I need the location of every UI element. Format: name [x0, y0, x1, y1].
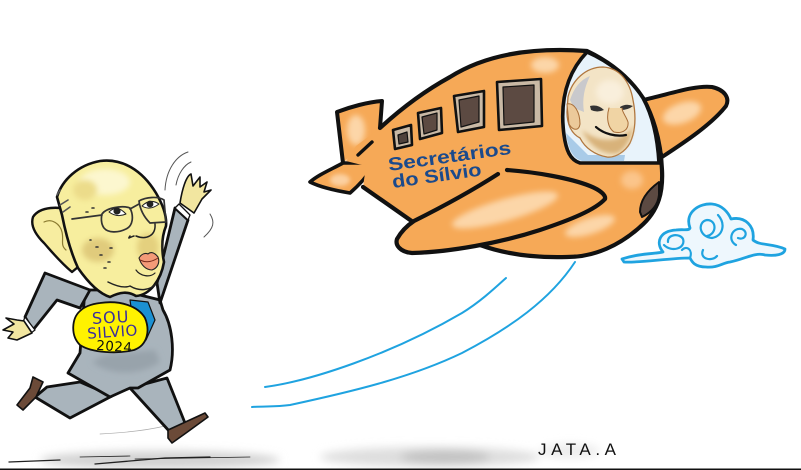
cloud [622, 204, 785, 267]
tail fin [337, 101, 382, 163]
front leg [130, 378, 185, 432]
shirt and tie [130, 300, 155, 340]
nose dark patch [640, 182, 659, 217]
chin wrinkle [108, 282, 156, 290]
torso jacket [68, 290, 172, 397]
cockpit window [563, 52, 659, 163]
mouth [139, 253, 159, 270]
front shoe [168, 413, 208, 443]
back leg [35, 382, 112, 418]
left arm [25, 273, 90, 330]
pilot portrait [566, 67, 635, 161]
head [32, 161, 166, 297]
left hand [3, 318, 32, 340]
windows [393, 79, 542, 149]
bottom border [0, 468, 801, 470]
side hair [57, 190, 70, 212]
contrails [252, 262, 575, 407]
tail seam [358, 142, 372, 155]
fuselage fill [346, 50, 662, 257]
near wing [397, 170, 605, 253]
campaign badge [73, 302, 147, 356]
motion lines [165, 152, 213, 237]
badge text: SOU [92, 307, 130, 328]
freckles [86, 208, 112, 268]
badge text: 2024 [96, 338, 133, 356]
ear [32, 208, 84, 272]
plane lettering: Secretários [387, 137, 512, 175]
plane lettering: do Sílvio [391, 159, 483, 192]
raised arm [157, 208, 188, 303]
running man [3, 152, 213, 443]
badge text: SILVIO [87, 321, 139, 343]
ground shadows [40, 444, 600, 469]
airplane [310, 50, 727, 257]
far wing [643, 87, 727, 157]
face [57, 161, 166, 297]
fuselage outline [363, 50, 662, 257]
plane lettering [387, 137, 512, 192]
back shoe [17, 377, 43, 410]
stabilizer [310, 163, 372, 193]
eyes [109, 208, 126, 216]
ground sketch strokes [9, 426, 250, 464]
badge text [87, 307, 139, 356]
nose [129, 224, 155, 238]
raised hand [180, 174, 211, 213]
signature: JATA.A [538, 440, 617, 459]
glasses [72, 197, 166, 232]
